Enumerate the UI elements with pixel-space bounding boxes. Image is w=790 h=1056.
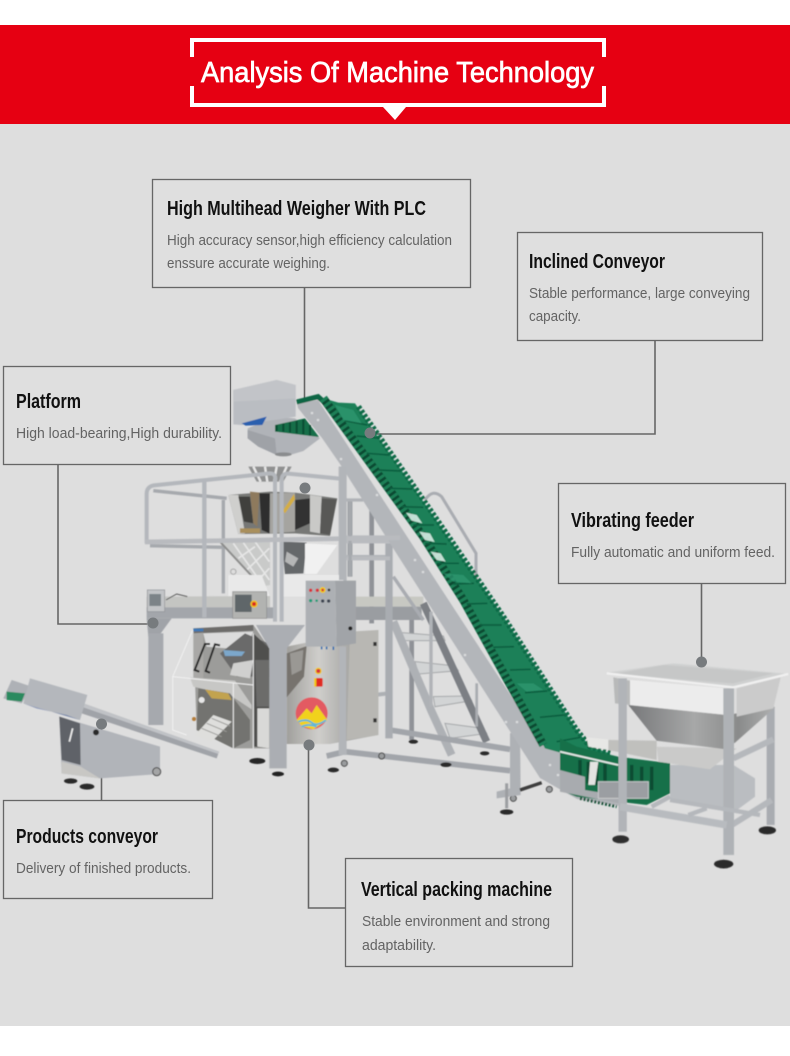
- base frame: [327, 730, 510, 771]
- callout dots: [96, 428, 707, 750]
- tray chute: [657, 747, 737, 769]
- panel: vibrating feeder: Fully automatic and uniform feed.: [571, 544, 775, 561]
- lower post of conveyor: [497, 730, 521, 798]
- white funnel: [305, 543, 337, 574]
- panel: vertical packing machine: Vertical packing machine: [361, 879, 552, 901]
- cleats: [345, 421, 581, 742]
- white chute: [195, 715, 232, 742]
- stair steps: [402, 633, 487, 738]
- hopper ring: [228, 492, 337, 536]
- connector: inclined conveyor: [370, 341, 655, 434]
- blue cable ends: [322, 646, 333, 650]
- belt highlights: [406, 513, 446, 562]
- title pointer: [383, 107, 406, 120]
- products conveyor: [3, 678, 219, 790]
- conveyor belt rail: [82, 703, 219, 758]
- glass door outline: [173, 630, 253, 748]
- vertical rails: [147, 473, 275, 622]
- curved handrail: [425, 493, 476, 590]
- back deck: [356, 597, 423, 607]
- panel: products conveyor: Products conveyor: [16, 826, 158, 848]
- stairs and conveyor support frame: [327, 467, 552, 815]
- cover: [23, 678, 87, 720]
- checker funnel: [220, 540, 270, 587]
- gear window: [287, 646, 307, 697]
- panel: inclined conveyor: Stable performance, large conveying: [529, 285, 750, 302]
- panel: high multihead weigher: [152, 180, 470, 288]
- rear platform rails: [150, 491, 350, 593]
- platform and control: [147, 590, 378, 744]
- yellow insert: [205, 689, 232, 700]
- shelf: [190, 677, 252, 709]
- white cover: [228, 575, 270, 597]
- frame back: [193, 625, 269, 748]
- round gauge: [231, 569, 236, 574]
- belt surface: [323, 398, 610, 767]
- panel: platform: Platform: [16, 391, 81, 413]
- teeth left edge base: [323, 398, 543, 745]
- control panels: [145, 473, 400, 722]
- touch screen panel: [233, 592, 267, 618]
- multihead weigher: [220, 467, 343, 597]
- title frame: [192, 40, 604, 105]
- conveyor body: [59, 717, 160, 778]
- panel: products conveyor: Delivery of finished products.: [16, 860, 191, 877]
- vibrator body: [670, 765, 755, 813]
- panel: inclined conveyor: capacity.: [529, 308, 581, 325]
- stair rail: [426, 612, 436, 707]
- side frame: [560, 770, 627, 805]
- panel: inclined conveyor: Inclined Conveyor: [529, 251, 665, 273]
- connector: platform: [58, 465, 153, 624]
- panel: vibrating feeder: Vibrating feeder: [571, 510, 694, 532]
- stair stringers: [393, 622, 452, 755]
- machine illustration: [3, 380, 788, 868]
- overhead storage hopper: [233, 380, 320, 456]
- hopper cone: [628, 705, 775, 749]
- feed end of belt: [275, 418, 319, 437]
- vibrating feeder: [560, 663, 788, 868]
- discharge chute: [3, 680, 32, 703]
- door latches: [373, 642, 377, 646]
- uprights: [331, 467, 355, 755]
- frame back leg: [759, 707, 783, 825]
- packing machine stainless body: [287, 630, 378, 744]
- connector: products conveyor: [100, 724, 102, 800]
- top discharge cone: [248, 467, 292, 482]
- column: [256, 625, 305, 768]
- panel: platform: High load-bearing,High durability.: [16, 425, 222, 442]
- frame front legs: [610, 678, 635, 832]
- forming and sealing mechanism: [173, 625, 333, 776]
- conveyor frame: [297, 400, 620, 806]
- box: [233, 380, 296, 425]
- upright and electrical box: [306, 467, 356, 755]
- funnel: [248, 417, 320, 455]
- panel: high multihead weigher: High accuracy sensor,high efficiency calculation: [167, 232, 452, 249]
- feet: [64, 778, 77, 784]
- panel: high multihead weigher: High Multihead Weigher With PLC: [167, 198, 426, 220]
- connector: packing machine: [308, 745, 345, 908]
- teeth right edge: [358, 407, 610, 753]
- back posts: [350, 500, 412, 740]
- connector: vibrating feeder: [700, 584, 702, 662]
- header banner: [0, 25, 790, 124]
- platform leg: [148, 633, 163, 725]
- tray: [587, 737, 608, 750]
- hopper top: [607, 663, 788, 687]
- green inclined belt: [297, 397, 610, 767]
- panel: vibrating feeder: [558, 484, 786, 584]
- panel: platform: [4, 366, 230, 464]
- left touch panel: [147, 590, 165, 612]
- title: Analysis Of Machine Technology: [201, 57, 594, 89]
- blue drive: [242, 417, 267, 426]
- teeth left edge: [323, 398, 543, 745]
- lower belt end: [560, 738, 670, 805]
- panel: high multihead weigher: enssure accurate weighing.: [167, 255, 330, 272]
- logo: [296, 697, 328, 729]
- panel: vertical packing machine: adaptability.: [362, 937, 436, 954]
- platform deck: [147, 596, 270, 608]
- connector: weigher: [304, 288, 306, 410]
- panel: products conveyor: [4, 800, 212, 898]
- feet and casters: [328, 740, 513, 815]
- top arc of belt: [297, 397, 329, 407]
- panel: vertical packing machine: [346, 858, 572, 966]
- red stop buttons: [315, 668, 322, 674]
- panel: inclined conveyor: [518, 232, 762, 340]
- center funnel: [282, 542, 307, 574]
- panel: vertical packing machine: Stable environment and strong: [362, 913, 550, 930]
- blue corner: [193, 626, 203, 634]
- black handles: [195, 644, 220, 673]
